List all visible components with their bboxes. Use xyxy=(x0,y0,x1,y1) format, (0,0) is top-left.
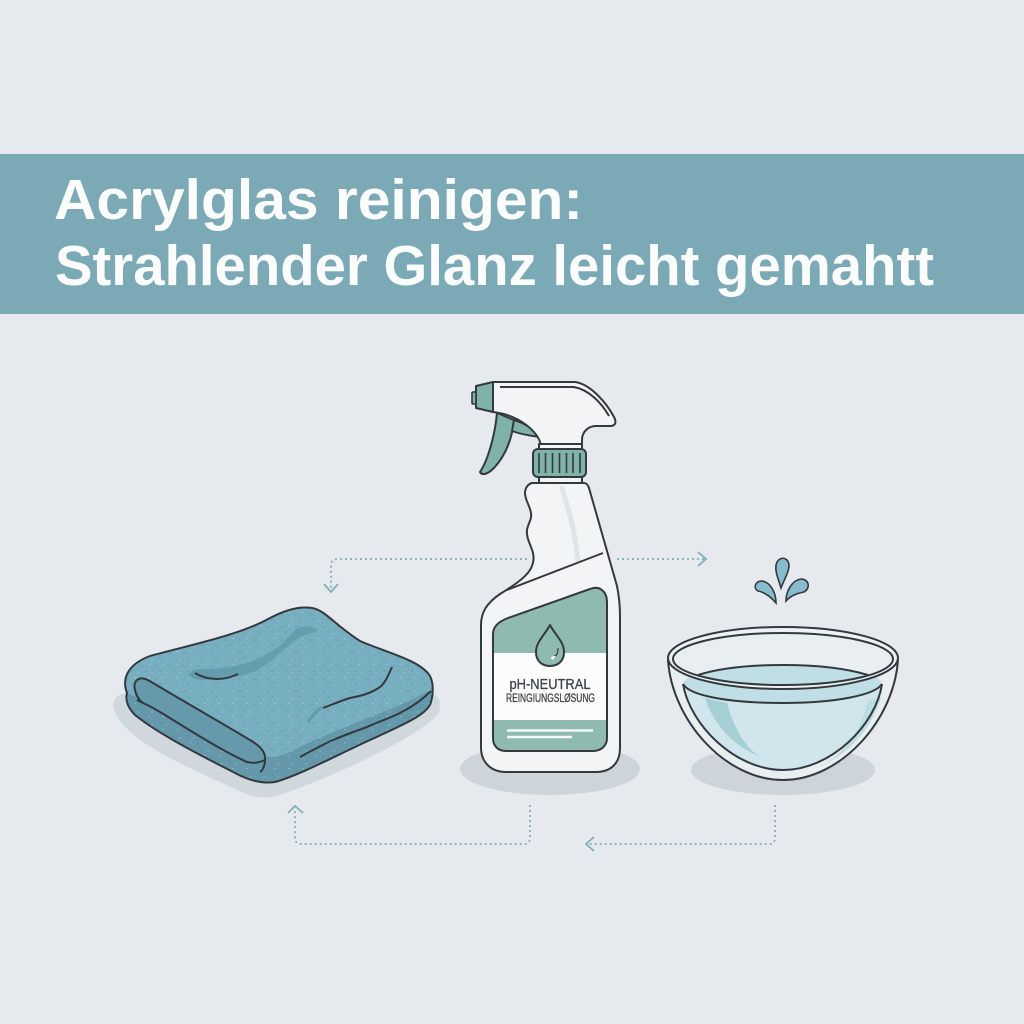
title banner xyxy=(0,154,1024,314)
icon: drop xyxy=(536,625,564,666)
towel crease xyxy=(188,626,318,680)
bowl shadow xyxy=(691,745,875,795)
title: Strahlender Glanz leicht gemahtt xyxy=(55,234,934,298)
icon: folded microfiber towel xyxy=(113,607,440,797)
bottle body xyxy=(481,483,620,772)
towel texture xyxy=(125,607,433,783)
towel base layer xyxy=(125,607,433,783)
arrow: bottle to towel (bottom) xyxy=(288,805,530,844)
arrow: bowl to bottle (bottom) xyxy=(586,805,775,851)
arrow: bottle to towel (top) xyxy=(324,559,527,592)
arrow: bottle to bowl (top) xyxy=(617,552,706,566)
label text: pH-NEUTRAL xyxy=(510,676,590,693)
bottle shadow xyxy=(460,743,640,795)
towel shadow xyxy=(113,692,440,797)
icon: spray bottle xyxy=(460,382,640,795)
bowl rim xyxy=(668,627,898,689)
water xyxy=(683,665,882,770)
towel fold xyxy=(134,678,265,772)
bottle cap xyxy=(533,449,586,477)
bowl glass xyxy=(668,627,898,780)
label text xyxy=(506,676,595,705)
bottle highlight xyxy=(561,486,578,562)
label lines xyxy=(507,730,593,737)
title xyxy=(54,168,934,298)
icon: water splash xyxy=(755,558,808,603)
label xyxy=(493,588,607,751)
icon: glass bowl with water xyxy=(668,558,898,795)
bottle shoulder line xyxy=(507,553,603,590)
neck xyxy=(539,444,582,486)
spray head xyxy=(493,382,615,445)
trigger xyxy=(480,413,514,474)
towel top surface xyxy=(125,607,432,757)
nozzle xyxy=(476,382,493,412)
title: Acrylglas reinigen: xyxy=(54,168,583,232)
label text: REINGIUNGSLØSUNG xyxy=(506,693,595,705)
